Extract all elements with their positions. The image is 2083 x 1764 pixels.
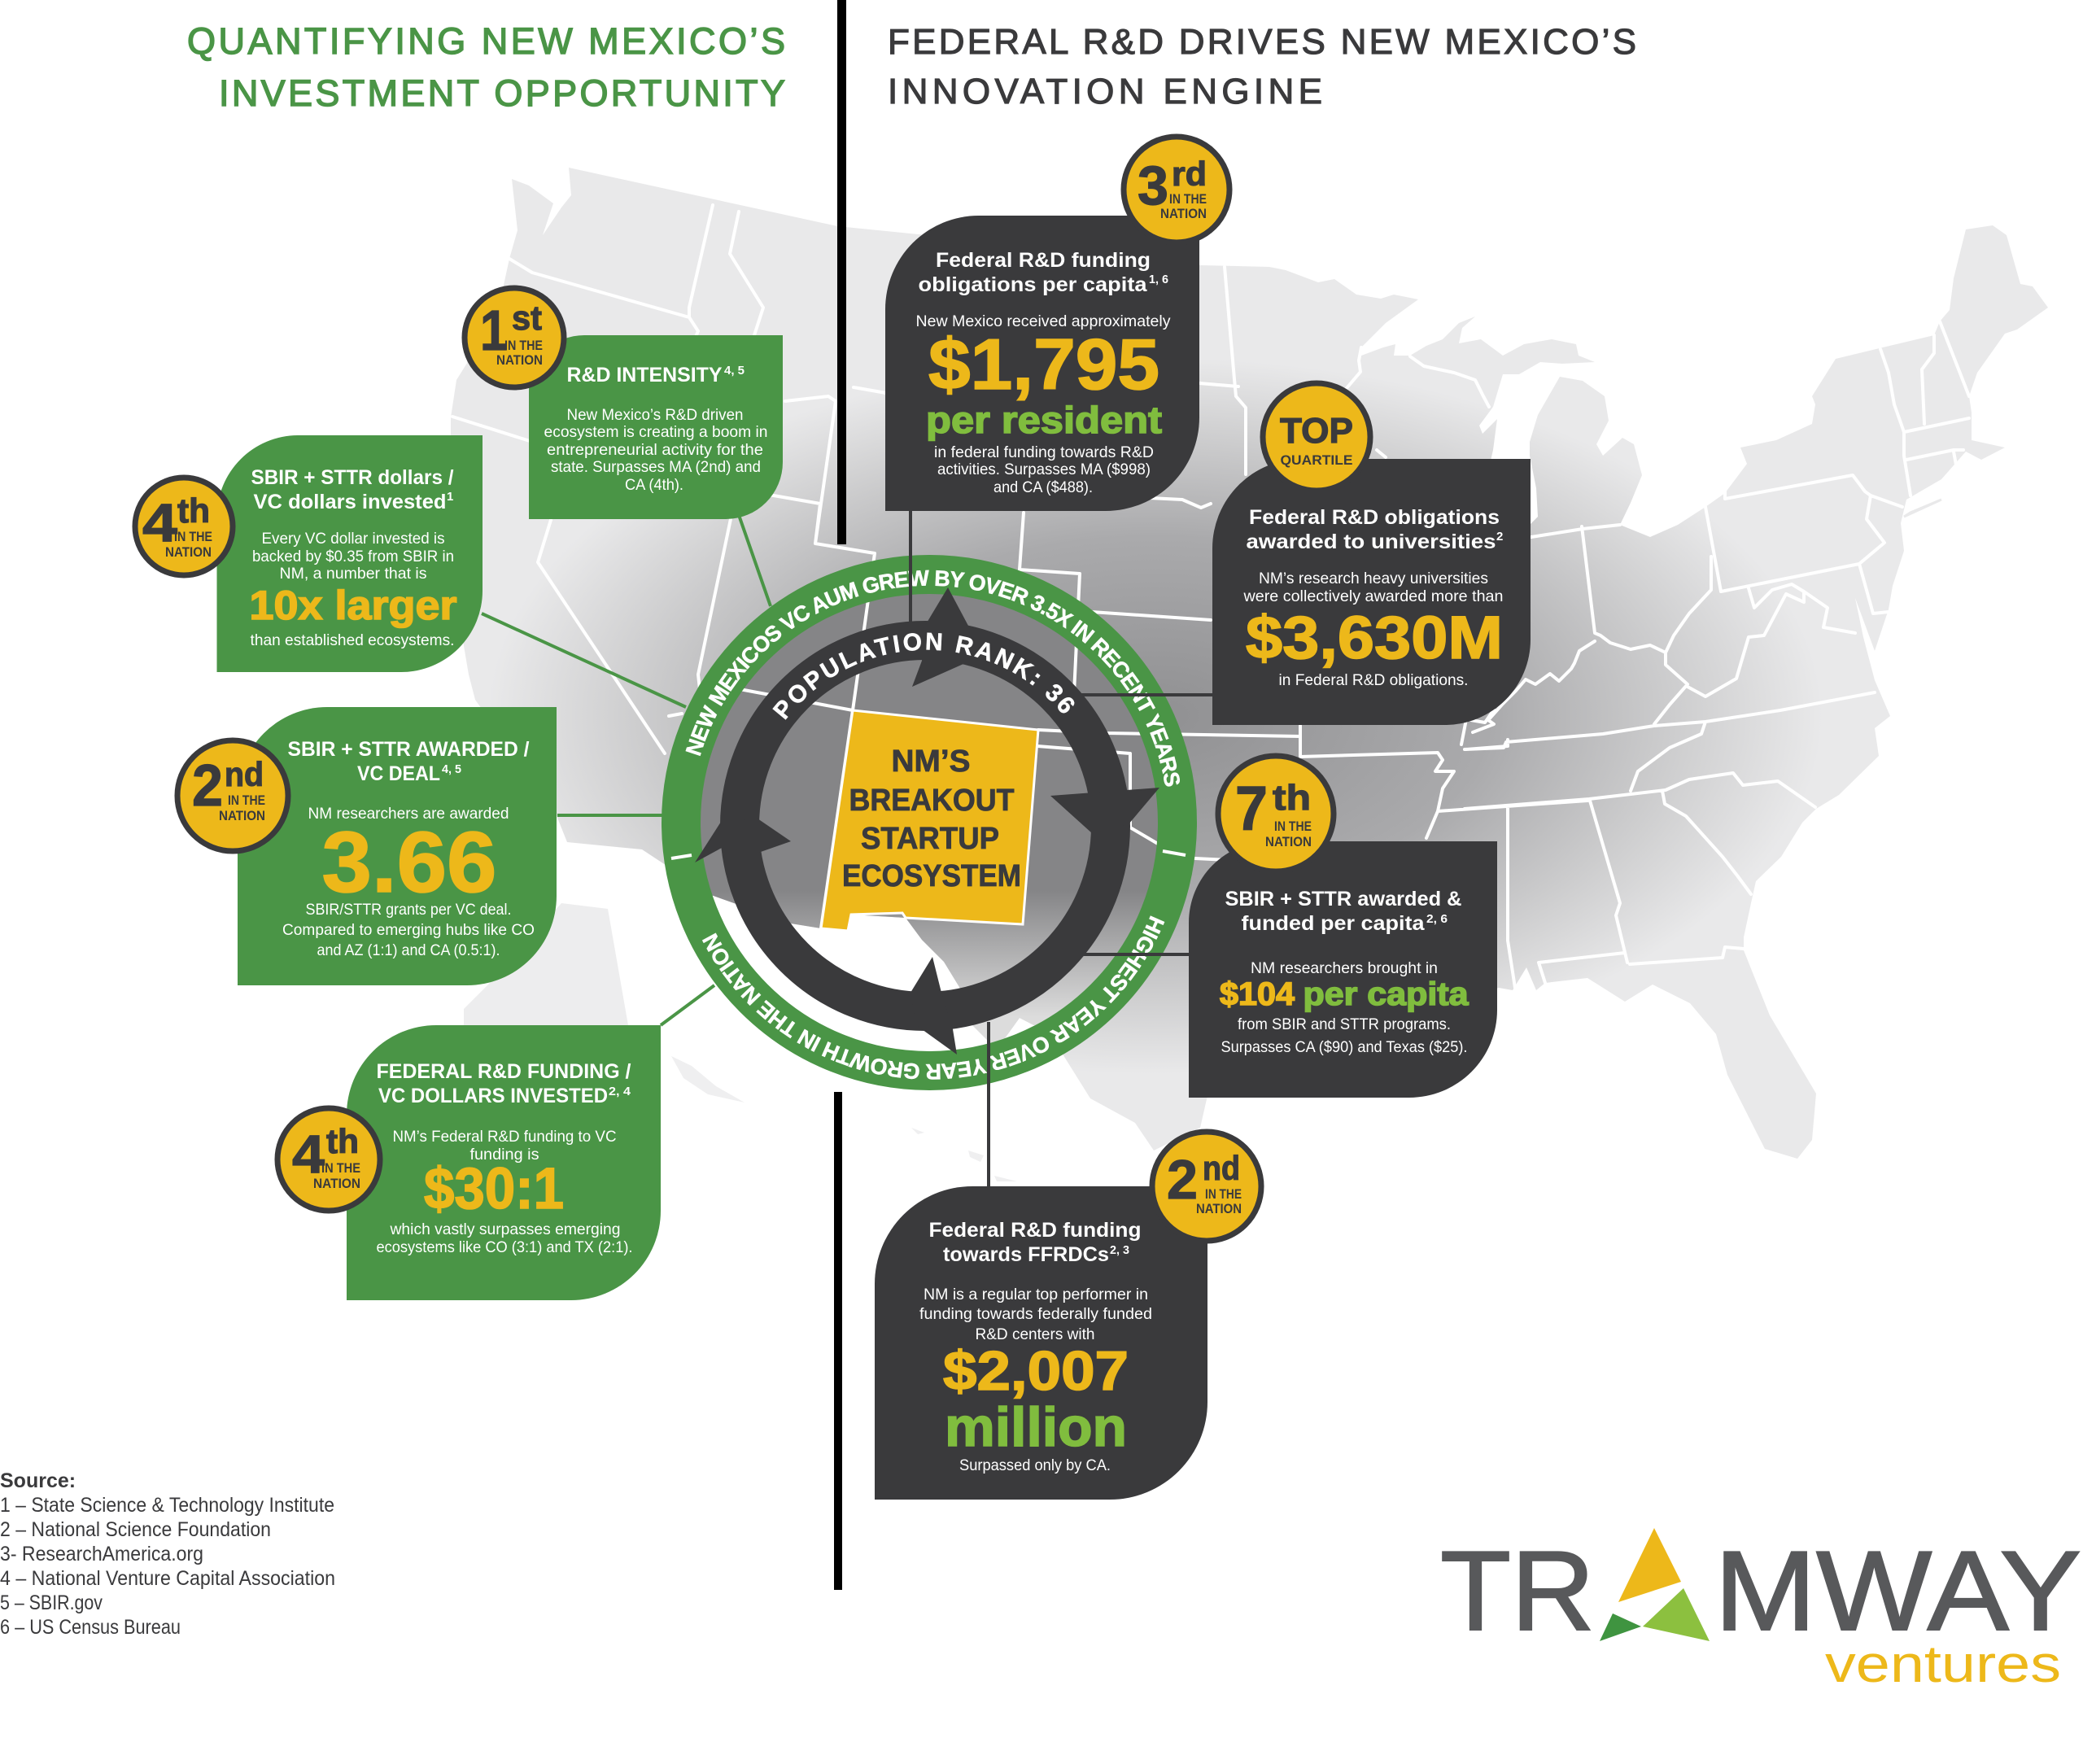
badge: 2nd in the nation (awards per deal) bbox=[177, 740, 288, 851]
map landmass bbox=[451, 168, 2048, 1159]
title: right heading bbox=[888, 22, 1636, 111]
badge: 2nd in the nation (awards per deal): nd bbox=[225, 755, 264, 793]
badge: 3rd in the nation: rd bbox=[1172, 155, 1207, 193]
population rank text: POPULATION RANK: 36 bbox=[772, 633, 1074, 720]
badge: 1st in the nation: NATION bbox=[496, 352, 543, 368]
panel: SBIR + STTR dollars / VC dollars: 10x larger bbox=[249, 583, 457, 628]
badge: 2nd in the nation (awards per deal): NATION bbox=[219, 808, 265, 823]
panel: Federal R&D funding / VC dollars: which vastly surpasses emerging bbox=[390, 1220, 620, 1238]
panel: SBIR + STTR awarded / VC deal: VC DEAL bbox=[357, 762, 440, 785]
title: left heading bbox=[187, 20, 785, 114]
badge: 7th in the nation: NATION bbox=[1265, 834, 1312, 849]
badge: 2nd in the nation (FFRDCs): nd bbox=[1203, 1149, 1240, 1187]
centre label: STARTUP bbox=[861, 822, 999, 856]
title: left heading: QUANTIFYING NEW MEXICO’S bbox=[187, 20, 785, 62]
green outer ring bbox=[662, 555, 1197, 1090]
panel: Federal R&D funding obligations per capita: activities. Surpasses MA ($998) bbox=[937, 461, 1151, 478]
panel: Federal R&D funding towards FFRDCs bbox=[875, 1186, 1207, 1500]
logo mark: dark green triangle bbox=[1600, 1613, 1641, 1641]
source list: 6 – US Census Bureau bbox=[0, 1616, 181, 1639]
logo mark: light green triangle bbox=[1643, 1588, 1710, 1641]
US map bbox=[451, 168, 2048, 1181]
panel: SBIR + STTR dollars / VC dollars: Every VC dollar invested is bbox=[262, 530, 445, 548]
state borders bbox=[452, 205, 1969, 988]
title: right heading: FEDERAL R&D DRIVES NEW MEXICO’S bbox=[888, 22, 1636, 62]
Alaska inset bbox=[464, 903, 628, 1025]
panel: Federal R&D funding / VC dollars: FEDERAL R&D FUNDING / bbox=[376, 1060, 631, 1083]
panel: SBIR + STTR awarded & funded per capita: 2, 6 bbox=[1426, 912, 1448, 926]
badge: 2nd in the nation (awards per deal): 2 bbox=[192, 753, 223, 819]
panel: R&D intensity: state. Surpasses MA (2nd) and bbox=[551, 458, 761, 476]
panel: Federal R&D obligations awarded to universities: NM’s research heavy universities bbox=[1259, 570, 1488, 587]
logo: Tramway Ventures: MWAY bbox=[1714, 1528, 2081, 1654]
badge: 1st in the nation: st bbox=[512, 299, 542, 337]
source list: 2 – National Science Foundation bbox=[0, 1518, 271, 1541]
panel: Federal R&D funding towards FFRDCs: R&D centers with bbox=[975, 1325, 1095, 1343]
panel: SBIR + STTR awarded & funded per capita: Surpasses CA ($90) and Texas ($25). bbox=[1221, 1038, 1468, 1056]
source list bbox=[0, 1469, 335, 1639]
panel: R&D intensity: entrepreneurial activity for the bbox=[547, 441, 763, 459]
source list: 5 – SBIR.gov bbox=[0, 1592, 103, 1614]
panel: Federal R&D obligations awarded to universities: 2 bbox=[1496, 530, 1503, 544]
centre label: ECOSYSTEM bbox=[842, 859, 1021, 893]
badge: 7th in the nation: IN THE bbox=[1274, 819, 1312, 834]
panel: Federal R&D funding obligations per capita: Federal R&D funding bbox=[936, 249, 1151, 272]
badge: 4th in the nation (federal funding): th bbox=[326, 1122, 359, 1160]
badge: 4th in the nation (federal funding): NATION bbox=[313, 1176, 360, 1191]
badge: top quartile: TOP bbox=[1280, 411, 1353, 451]
badge: top quartile: QUARTILE bbox=[1281, 452, 1352, 468]
panel: SBIR + STTR dollars / VC dollars: VC dollars invested bbox=[254, 491, 446, 513]
panel: Federal R&D funding obligations per capita: and CA ($488). bbox=[993, 478, 1093, 496]
panel: Federal R&D funding obligations per capita: in federal funding towards R&D bbox=[934, 443, 1154, 461]
Alaska panhandle and Hawaii islands bbox=[671, 1056, 1017, 1181]
panel: Federal R&D funding towards FFRDCs: $2,007 bbox=[943, 1340, 1129, 1402]
panel: Federal R&D funding obligations per capita: New Mexico received approximately bbox=[916, 312, 1171, 330]
panel: Federal R&D funding / VC dollars: funding is bbox=[470, 1146, 539, 1164]
centre label bbox=[842, 744, 1021, 893]
badge: 7th in the nation: 7 bbox=[1235, 774, 1268, 844]
panel: SBIR + STTR dollars / VC dollars: NM, a number that is bbox=[280, 565, 427, 583]
source list: 4 – National Venture Capital Association bbox=[0, 1567, 335, 1590]
badge: 3rd in the nation: 3 bbox=[1138, 155, 1168, 216]
panel: Federal R&D funding towards FFRDCs: NM is a regular top performer in bbox=[924, 1286, 1148, 1303]
badge: 1st in the nation: 1 bbox=[480, 299, 508, 362]
darkened map inside ring bbox=[701, 594, 1158, 1040]
panel: SBIR + STTR awarded & funded per capita: from SBIR and STTR programs. bbox=[1238, 1015, 1451, 1033]
panel: SBIR + STTR awarded / VC deal: 3.66 bbox=[322, 814, 496, 910]
arrow: bottom bbox=[910, 957, 957, 1054]
badge: 1st in the nation: IN THE bbox=[504, 338, 543, 353]
ring tick marks bbox=[671, 851, 1186, 858]
panel: SBIR + STTR awarded / VC deal: NM researchers are awarded bbox=[308, 805, 509, 823]
panel: Federal R&D obligations awarded to universities: Federal R&D obligations bbox=[1249, 506, 1500, 529]
panel: R&D intensity: ecosystem is creating a boom in bbox=[544, 423, 768, 441]
badge: 4th in the nation (SBIR dollars): 4 bbox=[142, 492, 177, 552]
divider: upper black line bbox=[837, 0, 846, 544]
panel: Federal R&D obligations awarded to universities bbox=[1212, 459, 1531, 725]
panel: Federal R&D funding towards FFRDCs: funding towards federally funded bbox=[919, 1305, 1152, 1323]
source list: 1 – State Science & Technology Institute bbox=[0, 1494, 334, 1517]
arrow: left bbox=[695, 819, 791, 862]
badge: 1st in the nation bbox=[465, 288, 564, 387]
connector lines: dark bbox=[910, 511, 1212, 1186]
badge: 4th in the nation (SBIR dollars): th bbox=[177, 491, 210, 530]
badge: 7th in the nation bbox=[1218, 756, 1334, 871]
panel: SBIR + STTR awarded & funded per capita bbox=[1189, 841, 1497, 1098]
ring text bottom: HIGHEST YEAR OVER YEAR GROWTH IN THE NATION bbox=[701, 915, 1165, 1080]
arrow: right bbox=[1050, 788, 1159, 833]
badge: 2nd in the nation (FFRDCs): IN THE bbox=[1205, 1186, 1242, 1202]
panel: Federal R&D funding towards FFRDCs: million bbox=[945, 1396, 1127, 1458]
panel: SBIR + STTR dollars / VC dollars bbox=[216, 435, 483, 672]
panel: Federal R&D funding / VC dollars: ecosystems like CO (3:1) and TX (2:1). bbox=[376, 1238, 633, 1256]
badge: top quartile bbox=[1263, 383, 1370, 491]
badge: 4th in the nation (SBIR dollars) bbox=[135, 478, 233, 575]
panel: Federal R&D funding obligations per capita: obligations per capita bbox=[918, 273, 1148, 296]
panel: SBIR + STTR awarded / VC deal: 4, 5 bbox=[442, 762, 461, 776]
panel: Federal R&D funding towards FFRDCs: towards FFRDCs bbox=[943, 1243, 1109, 1266]
badge: 4th in the nation (federal funding): 4 bbox=[292, 1124, 325, 1184]
panel: Federal R&D funding / VC dollars: $30:1 bbox=[424, 1157, 564, 1221]
title: left heading: INVESTMENT OPPORTUNITY bbox=[219, 72, 785, 114]
panel: Federal R&D funding / VC dollars bbox=[347, 1025, 661, 1300]
panel: SBIR + STTR awarded / VC deal: SBIR/STTR grants per VC deal. bbox=[306, 901, 511, 919]
badge: 4th in the nation (federal funding) bbox=[277, 1108, 380, 1211]
badge: 7th in the nation: th bbox=[1273, 778, 1311, 818]
panel: SBIR + STTR awarded / VC deal bbox=[238, 707, 557, 985]
New Mexico state shape bbox=[821, 710, 1038, 931]
Long Island bbox=[1904, 500, 1941, 517]
panel: SBIR + STTR awarded & funded per capita: SBIR + STTR awarded & bbox=[1225, 888, 1461, 910]
panel: SBIR + STTR dollars / VC dollars: backed by $0.35 from SBIR in bbox=[252, 548, 454, 565]
panel: SBIR + STTR dollars / VC dollars: SBIR + STTR dollars / bbox=[251, 466, 454, 489]
panel: SBIR + STTR awarded / VC deal: SBIR + STTR AWARDED / bbox=[288, 738, 530, 761]
panel: Federal R&D funding / VC dollars: 2, 4 bbox=[609, 1085, 631, 1098]
panel: Federal R&D funding obligations per capita: per resident bbox=[926, 399, 1162, 441]
badge: 2nd in the nation (awards per deal): IN THE bbox=[228, 792, 265, 808]
badge: 2nd in the nation (FFRDCs): NATION bbox=[1196, 1201, 1242, 1216]
badge: 3rd in the nation: NATION bbox=[1160, 206, 1207, 221]
panel: Federal R&D obligations awarded to universities: $3,630M bbox=[1246, 604, 1503, 671]
divider: lower black line bbox=[834, 1092, 842, 1590]
logo mark: yellow triangle bbox=[1618, 1528, 1681, 1602]
source list: 3- ResearchAmerica.org bbox=[0, 1543, 203, 1565]
panel: R&D intensity: R&D INTENSITY bbox=[566, 364, 723, 386]
panel: Federal R&D obligations awarded to universities: awarded to universities bbox=[1247, 531, 1496, 553]
title: right heading: INNOVATION ENGINE bbox=[888, 72, 1322, 111]
panel: SBIR + STTR awarded & funded per capita: per capita bbox=[1304, 976, 1469, 1012]
panel: Federal R&D funding towards FFRDCs: Federal R&D funding bbox=[929, 1219, 1141, 1242]
panel: Federal R&D obligations awarded to universities: in Federal R&D obligations. bbox=[1279, 671, 1468, 689]
arrow: top bbox=[912, 587, 968, 687]
badge: 3rd in the nation: IN THE bbox=[1169, 191, 1207, 207]
logo: Tramway Ventures: ventures bbox=[1825, 1635, 2061, 1693]
centre label: BREAKOUT bbox=[849, 784, 1014, 818]
connector lines: green bbox=[482, 515, 771, 1025]
logo: Tramway Ventures bbox=[1440, 1528, 2081, 1693]
panel: Federal R&D funding / VC dollars: NM’s Federal R&D funding to VC bbox=[392, 1128, 617, 1146]
panel: SBIR + STTR awarded & funded per capita: funded per capita bbox=[1242, 912, 1426, 935]
panel: Federal R&D funding obligations per capita: $1,795 bbox=[928, 324, 1159, 404]
dark cycle ring with arrows bbox=[695, 587, 1159, 1054]
panel: SBIR + STTR awarded / VC deal: and AZ (1:1) and CA (0.5:1). bbox=[317, 941, 500, 959]
panel: R&D intensity: CA (4th). bbox=[625, 476, 683, 494]
badge: 2nd in the nation (FFRDCs): 2 bbox=[1167, 1149, 1198, 1211]
source list: Source: bbox=[0, 1469, 76, 1492]
panel: R&D intensity bbox=[529, 335, 783, 519]
centre label: NM’S bbox=[892, 744, 970, 779]
badge: 4th in the nation (SBIR dollars): IN THE bbox=[174, 529, 212, 544]
panel: SBIR + STTR awarded / VC deal: Compared to emerging hubs like CO bbox=[282, 921, 535, 939]
panel: Federal R&D funding towards FFRDCs: 2, 3 bbox=[1110, 1243, 1129, 1257]
panel: Federal R&D funding obligations per capita: 1, 6 bbox=[1149, 273, 1168, 286]
badge: 2nd in the nation (FFRDCs) bbox=[1152, 1132, 1261, 1241]
panel: Federal R&D funding towards FFRDCs: Surpassed only by CA. bbox=[959, 1456, 1111, 1474]
panel: Federal R&D obligations awarded to universities: were collectively awarded more than bbox=[1242, 587, 1504, 605]
badge: 4th in the nation (federal funding): IN THE bbox=[321, 1160, 360, 1176]
logo: Tramway Ventures: TR bbox=[1440, 1528, 1595, 1654]
panel: R&D intensity: New Mexico’s R&D driven bbox=[566, 406, 744, 424]
panel: SBIR + STTR awarded & funded per capita: $104 bbox=[1220, 976, 1295, 1012]
panel: SBIR + STTR awarded & funded per capita: NM researchers brought in bbox=[1251, 959, 1438, 977]
panel: SBIR + STTR dollars / VC dollars: than established ecosystems. bbox=[251, 631, 454, 649]
badge: 4th in the nation (SBIR dollars): NATION bbox=[165, 544, 212, 560]
panel: Federal R&D funding obligations per capita bbox=[885, 216, 1199, 511]
panel: Federal R&D funding / VC dollars: VC DOLLARS INVESTED bbox=[378, 1085, 608, 1107]
ring text top: NEW MEXICOS VC AUM GREW BY OVER 3.5X IN RECENT YEARS bbox=[685, 570, 1180, 787]
panel: R&D intensity: 4, 5 bbox=[724, 364, 745, 378]
badge: 3rd in the nation bbox=[1124, 137, 1229, 242]
panel: SBIR + STTR dollars / VC dollars: 1 bbox=[447, 490, 453, 504]
